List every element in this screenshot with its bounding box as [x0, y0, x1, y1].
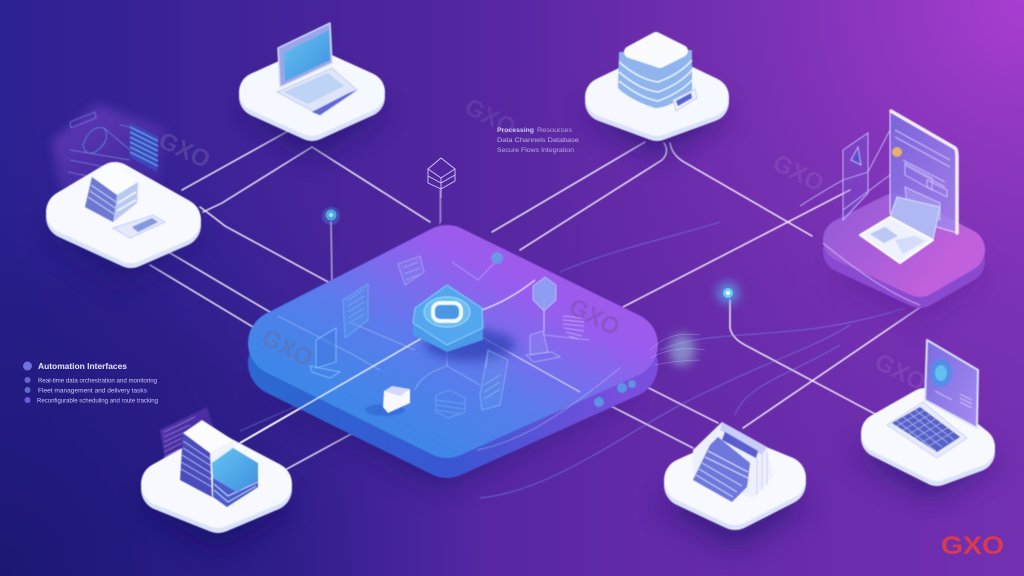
panel: top-right server node	[585, 38, 730, 156]
icon: central hexagon chip	[413, 285, 515, 361]
stripe panel	[130, 123, 158, 172]
panel: central platform	[240, 252, 636, 490]
icon: left device	[310, 328, 340, 378]
node top	[163, 455, 270, 506]
node top	[845, 215, 963, 275]
icon: striped capsule	[563, 316, 584, 339]
watermarks: GXO	[460, 93, 520, 142]
node side	[881, 413, 975, 466]
platform side	[281, 278, 625, 445]
watermarks: GXO	[154, 127, 214, 174]
icon: shield pin	[533, 277, 556, 330]
icon: striped tile	[436, 390, 465, 418]
icon: side pane	[800, 130, 890, 220]
node shadow	[140, 465, 292, 550]
legend items: Real-time data orchestration and monitoring	[38, 378, 157, 384]
text block: top caption: Data Channels Database	[497, 137, 579, 144]
icon: top device	[398, 256, 424, 285]
icon: glowing pin right	[717, 282, 739, 304]
icon: right device	[526, 331, 560, 362]
text block: top caption: Secure Flows Integration	[497, 147, 574, 154]
icon: holographic panel	[343, 284, 368, 338]
icon: white cube	[365, 386, 410, 416]
node top	[881, 408, 975, 461]
icon: edge pins	[594, 380, 636, 407]
legend: left text block	[23, 362, 158, 404]
glow: data burst	[650, 334, 705, 366]
node shadow	[240, 72, 385, 156]
node side	[259, 73, 365, 121]
node side	[68, 189, 179, 246]
node side	[845, 226, 963, 286]
node shadow	[48, 195, 200, 285]
text block: top caption: Resources	[537, 127, 573, 134]
node side	[605, 77, 709, 121]
icon: glowing laptop	[860, 197, 940, 263]
watermarks: GXO	[257, 324, 317, 373]
legend items	[24, 377, 158, 404]
watermarks: GXO	[564, 293, 624, 342]
panel: left server node	[48, 105, 200, 285]
panel: bottom-right laptop node	[855, 340, 995, 500]
text block: top caption	[497, 127, 579, 154]
circuit traces on platform	[278, 262, 620, 450]
panel: bottom-left server node	[140, 407, 292, 550]
node shadow	[835, 240, 985, 320]
watermarks: GXO	[768, 149, 828, 198]
icon: lower device	[480, 350, 508, 410]
icon: laptop	[277, 23, 357, 115]
panel: right purple node	[800, 111, 985, 320]
icon: document tray	[693, 422, 773, 502]
watermarks: GXO	[870, 348, 930, 397]
connector lines	[150, 130, 925, 470]
legend items: Reconfigurable scheduling and route tracking	[37, 398, 158, 404]
hologram backdrop	[160, 407, 215, 465]
node top	[686, 458, 784, 503]
node top	[605, 72, 709, 116]
icon: tower and block	[180, 420, 258, 507]
icon: tablet screen	[890, 111, 957, 233]
node side	[163, 460, 270, 511]
icon: wire cube pin	[428, 158, 455, 222]
platform top surface	[281, 258, 625, 425]
panel: bottom-center document node	[660, 422, 808, 548]
icon: server stack	[618, 38, 697, 111]
icon: top pin	[491, 252, 503, 264]
node side	[686, 463, 784, 508]
icon: laptop with fingerprint screen	[887, 340, 978, 458]
node shadow	[585, 75, 730, 156]
node top	[259, 68, 365, 116]
logo: GXO: GXO	[941, 532, 1004, 560]
platform shadow	[260, 295, 630, 490]
node shadow	[855, 420, 995, 500]
icon: server box	[85, 163, 165, 238]
icon: blue pin left	[322, 207, 340, 225]
legend items: Fleet management and delivery tasks	[38, 388, 148, 394]
watermarks	[154, 93, 930, 397]
node shadow	[660, 465, 808, 548]
panel: top-left laptop node	[240, 23, 385, 156]
text block: top caption: Processing	[497, 127, 534, 134]
hologram lines	[68, 112, 130, 185]
thin signal lines	[240, 222, 905, 498]
node top	[68, 184, 179, 241]
legend heading: Automation Interfaces	[38, 362, 128, 371]
hologram backdrop	[52, 105, 165, 190]
